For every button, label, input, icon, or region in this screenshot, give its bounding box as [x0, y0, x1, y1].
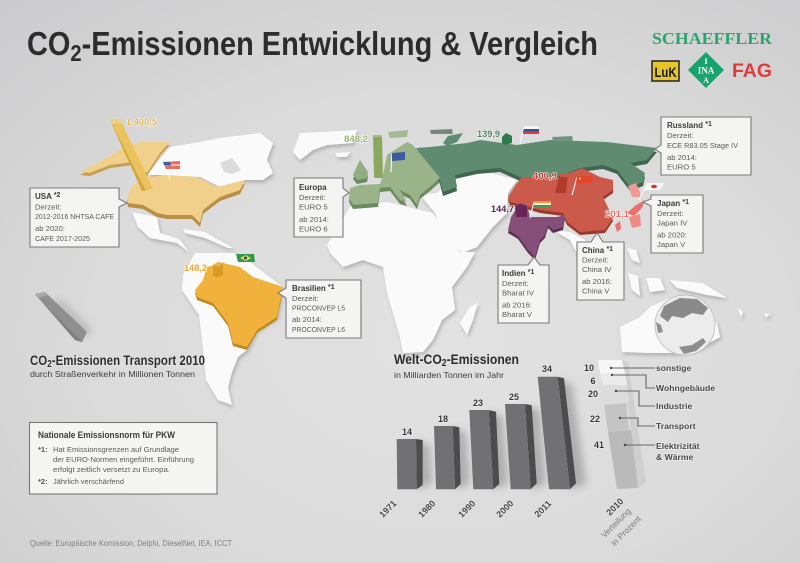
callout: USA: ab 2020:	[35, 224, 65, 233]
axis label: Verteilung	[599, 506, 633, 540]
callout: Brasilien: PROCONVEP L6	[292, 325, 345, 334]
logo: INA	[688, 52, 724, 88]
value bar: Russia 139,9	[502, 133, 512, 145]
callout: Russland	[655, 117, 751, 175]
segment values: 20	[588, 389, 598, 399]
value label: India: 144,7	[491, 204, 514, 215]
callout: Russland: *1	[705, 121, 712, 128]
logo: LuK: LuK	[654, 64, 676, 80]
logo: Schaeffler: SCHAEFFLER	[652, 29, 773, 48]
bar 1990	[469, 398, 508, 489]
title: CO	[27, 25, 76, 62]
panel: national emission standard notes: Nationale Emissionsnorm für PKW	[38, 430, 176, 440]
callout: Russland: ab 2014:	[667, 153, 697, 162]
flag: Japan	[639, 183, 664, 200]
callout: USA: Derzeit:	[35, 202, 62, 212]
year labels: 1971	[377, 498, 398, 519]
callout: Japan: *1	[682, 199, 689, 206]
value bar: Europe 848,2	[373, 135, 383, 178]
flag: China	[572, 176, 593, 195]
heading: transport: CO	[30, 352, 51, 368]
panel: national emission standard notes: Hat Emissionsgrenzen auf Grundlage	[53, 445, 179, 454]
segment values: 22	[590, 414, 600, 424]
logo: LuK	[652, 61, 679, 81]
bar 2011: 34	[542, 364, 552, 374]
callout: Indien: Bharat IV	[502, 288, 535, 298]
stacked bar: distribution 2010	[584, 360, 715, 548]
flag: Brazil	[236, 254, 255, 270]
callout: Europa	[294, 178, 349, 237]
panel: national emission standard notes: Jährlich verschärfend	[53, 477, 124, 486]
year labels: 1980	[416, 498, 437, 519]
value label: Russia: 139,9	[477, 129, 500, 140]
value bar: USA 1.400,5	[110, 119, 153, 191]
subheading: world emissions: in Milliarden Tonnen im Jahr	[394, 370, 504, 380]
leader lines	[610, 367, 655, 446]
callout: Japan: Japan V	[657, 240, 686, 249]
callout: Indien	[498, 257, 549, 323]
world map	[80, 129, 770, 405]
flag: USA	[163, 161, 180, 180]
segment values: 41	[594, 440, 604, 450]
callout: China: Derzeit:	[582, 256, 608, 264]
heading: world emissions: 2	[442, 358, 447, 369]
callout: USA	[30, 188, 127, 247]
callout: China	[577, 233, 624, 300]
value label: China: 400,9	[533, 171, 557, 182]
year labels	[377, 498, 553, 519]
callout: Europa: EURO 5	[299, 202, 328, 212]
callout: Europa: EURO 6	[299, 224, 328, 234]
callout: USA: 2012-2016 NHTSA CAFE	[35, 212, 114, 221]
callout: USA: CAFE 2017-2025	[35, 234, 90, 243]
source line: Quelle: Europäische Komission, Delphi, DieselNet, IEA, ICCT	[30, 539, 232, 548]
callout: China: China	[582, 246, 604, 255]
Hudson Bay	[220, 158, 241, 174]
callout: Japan: Japan	[657, 199, 680, 208]
callout: Europa: ab 2014:	[299, 215, 329, 224]
callout: Brasilien: Brasilien	[292, 284, 326, 293]
region: Alaska and USA	[80, 142, 245, 227]
axis label	[599, 496, 643, 548]
callout: Brasilien: Derzeit:	[292, 294, 318, 303]
bar 1971	[397, 427, 432, 489]
title: 2	[70, 40, 82, 66]
segment labels: Wohngebäude	[656, 383, 715, 393]
bar 1990: 23	[473, 398, 483, 408]
callout: Russland: Russland	[667, 121, 703, 130]
value label: USA: 1.400,5	[126, 117, 158, 128]
callout: Russland: ECE R83.05 Stage IV	[667, 141, 739, 150]
callout: Indien: ab 2016:	[502, 300, 532, 310]
logo: INA: A	[703, 76, 709, 85]
callout: Indien: Derzeit:	[502, 279, 528, 288]
callout: Brasilien: *1	[328, 284, 335, 291]
segment values: 10	[584, 363, 594, 373]
panel: national emission standard notes: *1:	[38, 445, 48, 454]
segment labels: Transport	[656, 421, 696, 431]
panel: national emission standard notes: erfolgt zeitlich versetzt zu Europa.	[53, 465, 170, 474]
callout: Indien: *1	[528, 269, 535, 276]
segment values: 6	[590, 376, 596, 386]
callout: China: ab 2016:	[582, 277, 612, 286]
year labels: 2000	[494, 498, 515, 519]
bar 2000	[505, 392, 546, 489]
panel: national emission standard notes: *2:	[38, 477, 48, 486]
segment labels: Elektrizität	[656, 441, 700, 451]
bar 1980	[434, 414, 470, 489]
region: Japan	[615, 183, 645, 232]
legend bar: grey transport scale	[35, 292, 93, 342]
callout: Japan: Derzeit:	[657, 209, 684, 218]
value label: Japan: 201,1	[605, 209, 630, 220]
callout: Japan	[643, 195, 703, 253]
segment values	[584, 363, 604, 450]
bar 2011	[538, 364, 586, 489]
heading: transport: -Emissionen Transport 2010	[52, 352, 205, 368]
value bar: Brazil 148,2	[213, 262, 223, 277]
logo: INA: INA	[698, 66, 715, 76]
logo: FAG: FAG	[732, 61, 772, 82]
year labels: 1990	[456, 498, 477, 519]
callout: Brasilien: PROCONVEP L5	[292, 304, 345, 312]
region: China	[508, 168, 613, 235]
callout: Russland: Derzeit:	[667, 131, 694, 140]
axis label: in Prozent	[609, 513, 643, 548]
callout: China: *1	[606, 246, 613, 253]
callout: Japan: Japan IV	[657, 218, 688, 228]
callout: Japan: ab 2020:	[657, 230, 687, 240]
callout: Europa: Derzeit:	[299, 193, 326, 202]
callout: Indien: Indien	[502, 269, 526, 278]
segment labels: Industrie	[656, 401, 693, 411]
flag: Russia	[520, 126, 539, 144]
callout: China: China V	[582, 286, 610, 296]
value bar: China 400,9	[555, 173, 568, 193]
bar 1980: 18	[438, 414, 448, 424]
heading: world emissions: Welt-CO	[394, 351, 449, 367]
callout: China: China IV	[582, 265, 612, 274]
year labels: 2011	[532, 498, 553, 519]
region: Russia	[416, 129, 657, 196]
callout: Indien: Bharat V	[502, 310, 533, 319]
callout: Russland: EURO 5	[667, 162, 696, 172]
segment labels: & Wärme	[656, 452, 693, 462]
flag: India	[530, 201, 551, 218]
region: Europe	[349, 130, 440, 209]
region: India	[508, 203, 565, 260]
value label: Europe: 848,2	[344, 134, 368, 145]
callout: Brasilien	[278, 280, 361, 338]
segment labels: sonstige	[656, 363, 692, 373]
heading: transport: 2	[47, 359, 52, 370]
callout: Brasilien: ab 2014:	[292, 315, 322, 324]
segment labels	[656, 363, 715, 462]
panel: national emission standard notes	[30, 422, 217, 494]
value bar: India 144,7	[515, 204, 527, 217]
bar 1971: 14	[402, 427, 412, 437]
globe	[655, 295, 715, 355]
white continents	[132, 130, 770, 405]
flag: Europe	[391, 152, 405, 172]
region: Brazil	[195, 263, 283, 350]
callout: USA: USA	[35, 192, 52, 201]
bar chart: world CO2 emissions	[377, 364, 586, 519]
axis label: 2010	[604, 496, 625, 517]
value label: Brazil: 148,2	[184, 263, 207, 274]
logo: INA: I	[704, 57, 708, 66]
callout: USA: *2	[54, 192, 61, 199]
heading: world emissions: -Emissionen	[447, 351, 519, 367]
bar 2000: 25	[509, 392, 519, 402]
callout: Europa: Europa	[299, 183, 327, 192]
panel: national emission standard notes: der EURO-Normen eingeführt. Einführung	[53, 455, 194, 464]
title: -Emissionen Entwicklung & Vergleich	[82, 25, 598, 62]
subheading: transport: durch Straßenverkehr in Millionen Tonnen	[30, 369, 195, 379]
